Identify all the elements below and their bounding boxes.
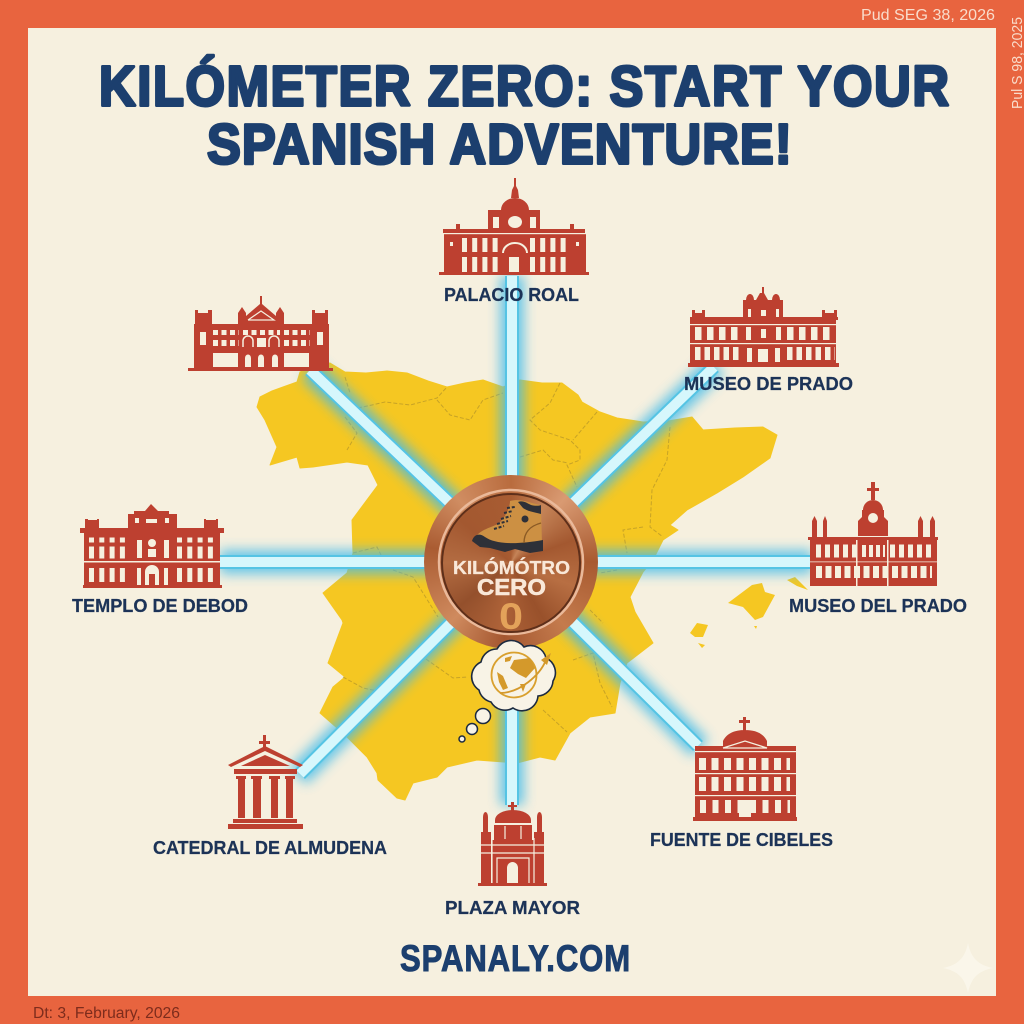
footer site name: SPANALY.COM	[400, 939, 630, 980]
medal: kilómetro cero	[424, 475, 598, 649]
building: templo de debod (left)	[80, 504, 224, 588]
medal: kilómetro cero: 0	[499, 596, 523, 637]
building: museo del prado (right)	[808, 482, 938, 586]
label: plaza mayor: PLAZA MAYOR	[445, 897, 580, 918]
building: upper left	[188, 296, 333, 371]
bottom date stamp: Dt: 3, February, 2026	[33, 1005, 180, 1022]
light beams	[220, 276, 812, 805]
beam glow	[220, 276, 812, 805]
Balearic Islands	[690, 577, 808, 648]
building: fuente de cibeles (lower right)	[693, 717, 797, 821]
label: fuente de cibeles: FUENTE DE CIBELES	[650, 829, 833, 850]
thought bubble	[459, 641, 555, 742]
sparkle mark	[943, 943, 993, 993]
medal body	[424, 475, 598, 649]
building: catedral (lower left)	[228, 735, 303, 829]
icon: globe	[492, 652, 551, 698]
building: plaza mayor (bottom)	[478, 802, 547, 886]
title	[99, 55, 949, 176]
label: templo de debod: TEMPLO DE DEBOD	[72, 595, 248, 616]
building: palacio (top)	[439, 178, 589, 275]
label: catedral de almudena: CATEDRAL DE ALMUDENA	[153, 837, 387, 858]
top date stamp: Pud SEG 38, 2026	[861, 7, 995, 24]
medal: kilómetro cero: CERO	[477, 574, 546, 600]
title: SPANISH ADVENTURE!	[207, 113, 792, 176]
label: museo del prado: MUSEO DEL PRADO	[789, 595, 967, 616]
regional borders	[343, 377, 670, 732]
label: palacio roal: PALACIO ROAL	[444, 284, 579, 305]
title: KILÓMETER ZERO: START YOUR	[99, 55, 949, 118]
label: museo de prado: MUSEO DE PRADO	[684, 373, 853, 394]
beam core	[220, 276, 812, 805]
building: museo de prado (upper right)	[688, 287, 839, 367]
map of Spain	[257, 363, 808, 800]
medal text: KILÓMÓTRO	[453, 557, 570, 578]
icon: hiking boot	[472, 500, 543, 553]
